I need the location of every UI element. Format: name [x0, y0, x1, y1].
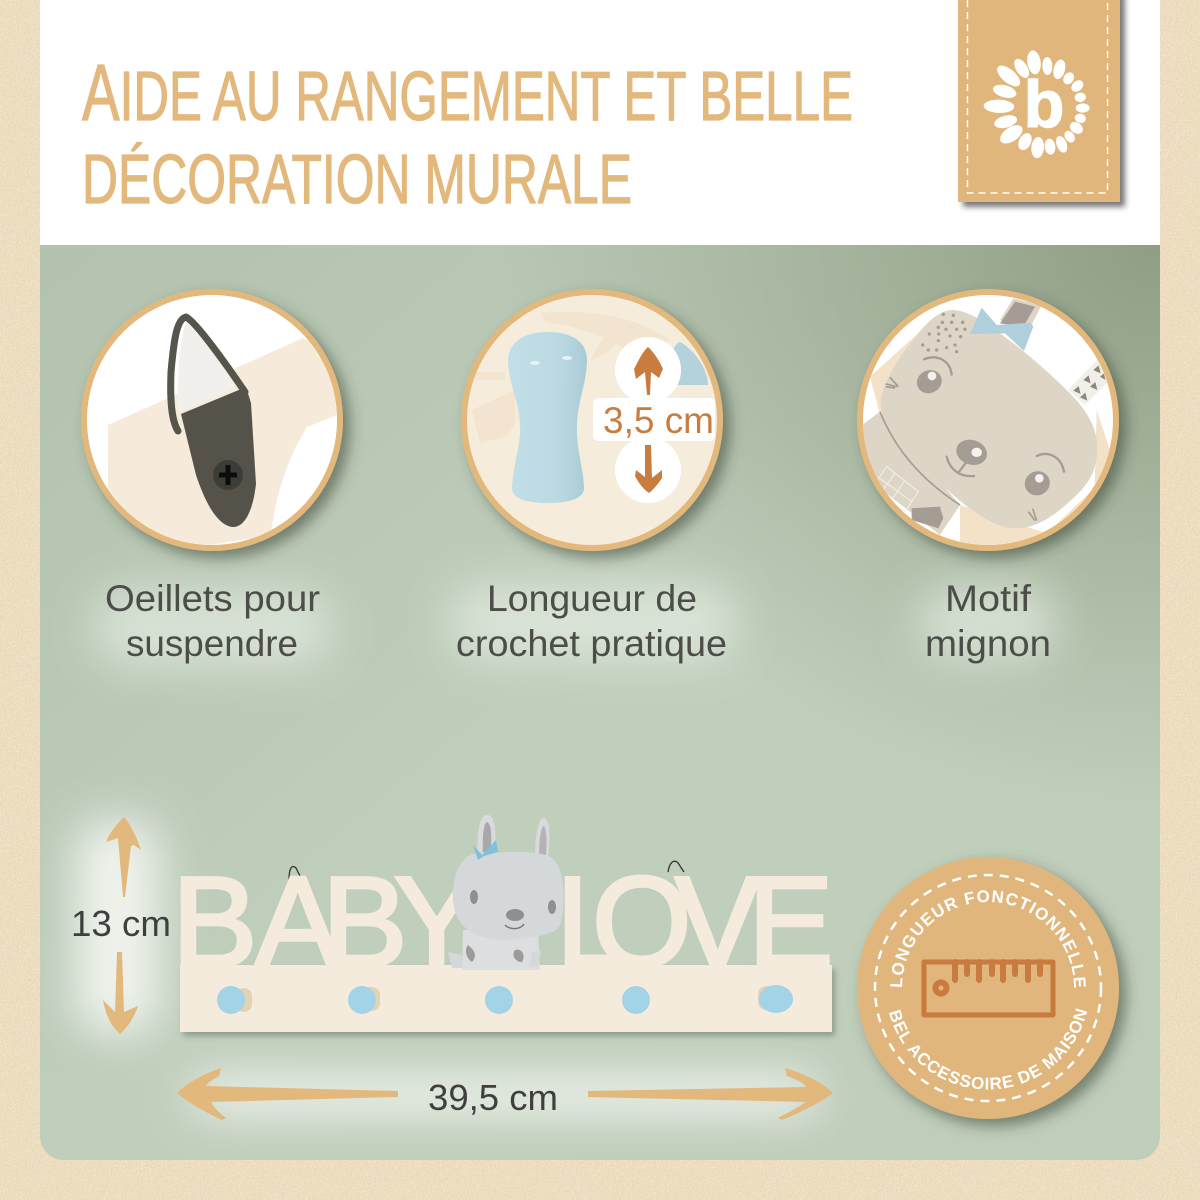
- wood cutouts: [470, 312, 670, 443]
- glimpse through ring: [178, 322, 236, 412]
- blue hooks: [217, 985, 793, 1014]
- label: motif: mignon: [925, 623, 1051, 664]
- soft white glow behind product dimensions: [75, 820, 820, 1115]
- measure badge: [593, 337, 715, 503]
- second blue hook: [671, 342, 708, 385]
- arrow: height down: [103, 952, 138, 1034]
- title: [82, 48, 853, 218]
- bunny body: [860, 412, 960, 535]
- label: eyelets: Oeillets pour: [105, 578, 320, 619]
- icon: metal plate and screw: [181, 387, 256, 527]
- green panel: [40, 245, 1160, 1160]
- bunny figure: [448, 815, 564, 970]
- label: hook length: crochet pratique: [456, 623, 727, 664]
- badge text top: LONGUEUR FONCTIONNELLE: [890, 890, 1086, 988]
- label: motif: Motif: [945, 578, 1032, 619]
- icon: sunflower b logo: b: [1024, 67, 1064, 141]
- hook length value: 3,5 cm: [603, 400, 714, 441]
- feature circle: hook length 3,5 cm: [460, 288, 725, 553]
- word LOVE: LOVE: [556, 851, 833, 994]
- wood behind bunny: [870, 332, 1110, 550]
- arrow: height up: [106, 817, 141, 897]
- label: hook length: Longueur de: [487, 578, 697, 619]
- bow: [970, 308, 1033, 351]
- left ear: [1000, 298, 1041, 324]
- eye left: [916, 370, 942, 394]
- header band: [40, 0, 1160, 245]
- arrow: width right: [588, 1068, 833, 1120]
- freckles: [921, 313, 967, 353]
- board base: [180, 965, 832, 1032]
- icon: metal hanging ring: [171, 317, 245, 431]
- title: DÉCORATION MURALE: [82, 140, 632, 218]
- label: hook length: [456, 578, 727, 664]
- icon: sunflower b logo: [983, 50, 1090, 159]
- body check pattern: [873, 467, 918, 512]
- right ear: [1068, 358, 1108, 405]
- product: BABY LOVE coat rack: [172, 815, 833, 1032]
- feature circle: hanging eyelet: [80, 288, 345, 560]
- bunny face: [881, 310, 1097, 528]
- word BABY: BABY: [172, 851, 479, 994]
- height value: 13 cm: [71, 903, 171, 944]
- blue hook peg: [508, 332, 587, 503]
- arrow down: [635, 445, 662, 493]
- eye right: [1024, 471, 1050, 496]
- icon: ruler: [924, 962, 1053, 1015]
- title: AIDE AU RANGEMENT ET BELLE: [82, 48, 853, 137]
- wooden board: [108, 338, 345, 560]
- nose and mouth: [956, 440, 987, 465]
- badge text bottom: BEL ACCESSOIRE DE MAISON: [889, 1008, 1088, 1090]
- feature circle: cute motif: [856, 288, 1121, 553]
- brand tag with logo: [958, 0, 1120, 202]
- round badge: [855, 854, 1135, 1136]
- soft white glow behind labels: [95, 585, 1055, 665]
- arrow: width left: [177, 1068, 398, 1120]
- arrow up: [634, 347, 663, 395]
- label: motif: [925, 578, 1051, 664]
- hanging wires: [289, 861, 684, 880]
- width value: 39,5 cm: [428, 1077, 558, 1118]
- label: eyelets: suspendre: [126, 623, 298, 664]
- label: eyelets: [105, 578, 320, 664]
